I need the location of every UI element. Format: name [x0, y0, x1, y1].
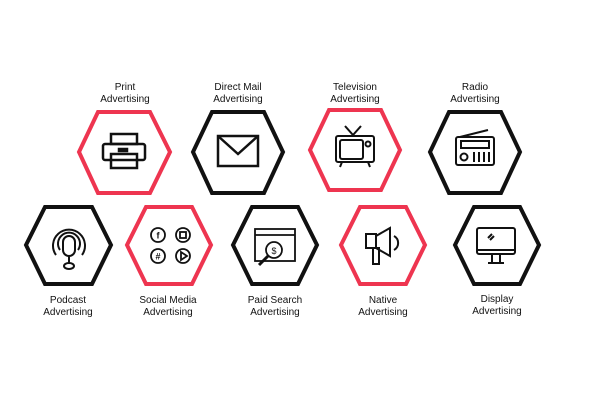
- card: television: [310, 82, 400, 190]
- card: print advertising: Advertising: [100, 94, 150, 105]
- card: paid search: $: [271, 246, 277, 256]
- label: radio: Radio: [462, 82, 488, 93]
- hexagon: radio: [430, 112, 520, 193]
- label: podcast: Podcast: [50, 295, 86, 306]
- card: radio: [430, 82, 520, 193]
- icon: printer: [103, 134, 145, 168]
- label: social media: Social Media: [139, 295, 197, 306]
- hexagon: paid search: [233, 207, 317, 284]
- card: radio: Advertising: [450, 94, 500, 105]
- hexagon: direct mail: [193, 112, 283, 193]
- hexagon: native: [341, 207, 425, 284]
- label: paid search: Paid Search: [248, 295, 302, 306]
- icon: search dollar: [255, 229, 295, 265]
- card: display: [455, 207, 539, 317]
- label: native: Native: [369, 295, 398, 306]
- hexagon: social media: [127, 207, 211, 284]
- label: direct mail: Direct Mail: [214, 82, 262, 93]
- hexagon: display: [455, 207, 539, 284]
- icon: monitor: [477, 228, 515, 263]
- card: podcast: [26, 207, 111, 318]
- label: print: Print: [115, 82, 136, 93]
- icon: social icons: [151, 228, 190, 263]
- card: direct mail: Advertising: [213, 94, 263, 105]
- hexagon: television: [310, 110, 400, 190]
- card: television: Advertising: [330, 94, 380, 105]
- card: native: Advertising: [358, 307, 408, 318]
- hexagon: podcast: [26, 207, 111, 284]
- icon: microphone: [53, 230, 85, 269]
- label: television: Television: [333, 82, 377, 93]
- card: print advertising: [79, 82, 170, 193]
- icon: envelope: [218, 136, 258, 166]
- label: display: Display: [481, 294, 513, 305]
- card: social media: #: [155, 252, 161, 262]
- icon: megaphone: [366, 228, 398, 264]
- card: display: Advertising: [472, 306, 522, 317]
- card: social media: Advertising: [143, 307, 193, 318]
- card: paid search: Advertising: [250, 307, 300, 318]
- card: social media: [127, 207, 211, 318]
- card: social media: f: [156, 230, 160, 240]
- hexagon: print: [79, 112, 170, 193]
- card: direct mail: [193, 82, 283, 193]
- card: paid search: [233, 207, 317, 318]
- card: podcast: Advertising: [43, 307, 93, 318]
- icon: tv: [336, 126, 374, 167]
- card: native: [341, 207, 425, 318]
- icon: radio: [456, 130, 494, 165]
